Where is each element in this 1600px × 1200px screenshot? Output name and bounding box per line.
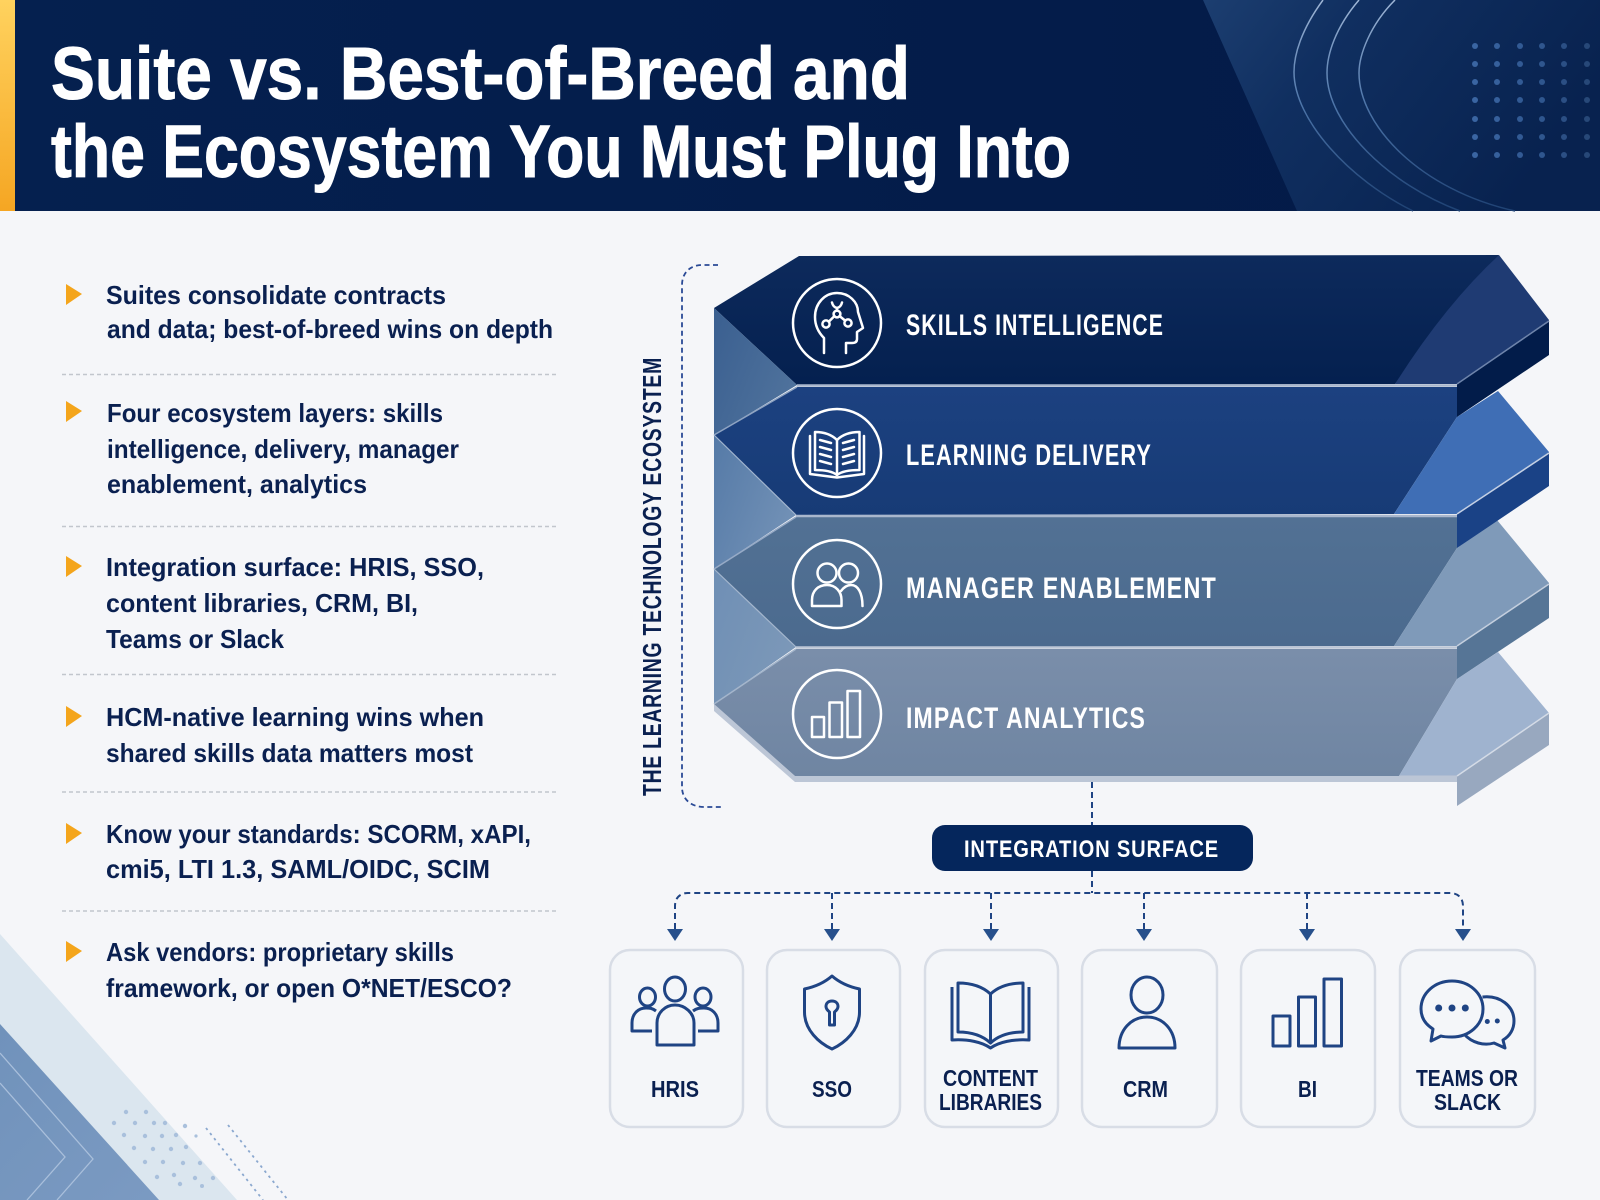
label: Teams or Slack bbox=[1416, 1065, 1518, 1115]
header concentric arcs bbox=[1294, 0, 1515, 211]
label: SSO: SSO bbox=[812, 1076, 852, 1102]
bullet: integration surface: Teams or Slack bbox=[106, 624, 285, 654]
bullet: integration surface: content libraries, CRM, BI, bbox=[106, 588, 418, 618]
decorative corner shapes bbox=[0, 934, 288, 1200]
card: HRIS bbox=[610, 950, 743, 1127]
connector from stack to integration surface bbox=[1091, 782, 1093, 825]
label: skills intelligence: SKILLS INTELLIGENCE bbox=[906, 309, 1164, 342]
header banner bbox=[0, 0, 1600, 211]
card: BI bbox=[1241, 950, 1375, 1127]
card: Teams or Slack bbox=[1400, 950, 1535, 1127]
bullet: HCM-native learning: HCM-native learning wins when bbox=[106, 702, 484, 732]
label: HRIS: HRIS bbox=[651, 1076, 699, 1102]
left bevel facets bbox=[714, 308, 797, 704]
label: manager enablement: MANAGER ENABLEMENT bbox=[906, 572, 1217, 605]
icon: person bbox=[1119, 977, 1175, 1048]
bullet: integration surface bbox=[66, 552, 484, 654]
layer: skills intelligence bbox=[714, 255, 1549, 417]
title: the Ecosystem You Must Plug Into bbox=[51, 110, 1071, 193]
bullet: four ecosystem layers bbox=[66, 398, 459, 499]
label: Teams or Slack: SLACK bbox=[1434, 1089, 1501, 1115]
bullet: suites vs best-of-breed: Suites consolidate contracts bbox=[106, 280, 446, 310]
bullet: ask vendors bbox=[66, 937, 512, 1003]
dashed distribution connectors bbox=[675, 871, 1463, 929]
bullet: ask vendors: framework, or open O*NET/ESCO? bbox=[106, 973, 512, 1003]
bullet: suites vs best-of-breed bbox=[66, 280, 553, 344]
card: SSO bbox=[767, 950, 900, 1127]
bullet: HCM-native learning bbox=[66, 702, 484, 768]
card: CRM bbox=[1082, 950, 1217, 1127]
layer: impact analytics bbox=[714, 649, 1549, 806]
label: CRM: CRM bbox=[1123, 1076, 1168, 1102]
label: Teams or Slack: TEAMS OR bbox=[1416, 1065, 1518, 1091]
bullet: standards bbox=[66, 819, 531, 884]
header lighter angled panel bbox=[1203, 0, 1600, 211]
icon: open book bbox=[952, 983, 1029, 1048]
bullet: HCM-native learning: shared skills data matters most bbox=[106, 738, 473, 768]
title bbox=[51, 32, 1071, 193]
bullet: four ecosystem layers: enablement, analytics bbox=[107, 469, 367, 499]
label: content libraries bbox=[939, 1065, 1042, 1115]
bullet: ask vendors: Ask vendors: proprietary skills bbox=[106, 937, 454, 967]
bullet: suites vs best-of-breed: and data; best-of-breed wins on depth bbox=[107, 314, 553, 344]
label: learning delivery: LEARNING DELIVERY bbox=[906, 439, 1152, 472]
icon: open book bbox=[793, 409, 881, 497]
layer: learning delivery bbox=[714, 387, 1549, 548]
layer: manager enablement bbox=[714, 517, 1549, 679]
integration surface pill: INTEGRATION SURFACE bbox=[964, 836, 1219, 863]
connector arrows bbox=[667, 929, 1471, 941]
icon: two people bbox=[793, 540, 881, 628]
ecosystem bracket bbox=[682, 265, 722, 807]
label: impact analytics: IMPACT ANALYTICS bbox=[906, 702, 1146, 735]
panel: key takeaways list bbox=[62, 280, 556, 1003]
bullet: four ecosystem layers: Four ecosystem layers: skills bbox=[107, 398, 443, 428]
label: content libraries: CONTENT bbox=[943, 1065, 1038, 1091]
gold accent bar bbox=[0, 0, 15, 211]
bullet: standards: Know your standards: SCORM, xAPI, bbox=[106, 819, 531, 849]
icon: chat bubbles bbox=[1421, 981, 1514, 1048]
icon: bar chart bbox=[1273, 979, 1342, 1046]
integration surface pill bbox=[932, 825, 1253, 871]
icon: shield with keyhole bbox=[804, 976, 860, 1049]
vertical ecosystem label: THE LEARNING TECHNOLOGY ECOSYSTEM bbox=[637, 357, 667, 796]
bullet: four ecosystem layers: intelligence, delivery, manager bbox=[107, 434, 459, 464]
bullet: standards: cmi5, LTI 1.3, SAML/OIDC, SCIM bbox=[106, 854, 490, 884]
icon: bar chart bbox=[793, 670, 881, 758]
icon: group of people bbox=[632, 977, 718, 1045]
icon: head with network bbox=[793, 279, 881, 367]
title: Suite vs. Best-of-Breed and bbox=[51, 32, 910, 115]
bullet: integration surface: Integration surface: HRIS, SSO, bbox=[106, 552, 484, 582]
label: BI: BI bbox=[1298, 1076, 1317, 1102]
header dot grid bbox=[1472, 43, 1590, 158]
layered ecosystem stack bbox=[714, 255, 1549, 806]
card: content libraries bbox=[925, 950, 1058, 1127]
label: content libraries: LIBRARIES bbox=[939, 1089, 1042, 1115]
